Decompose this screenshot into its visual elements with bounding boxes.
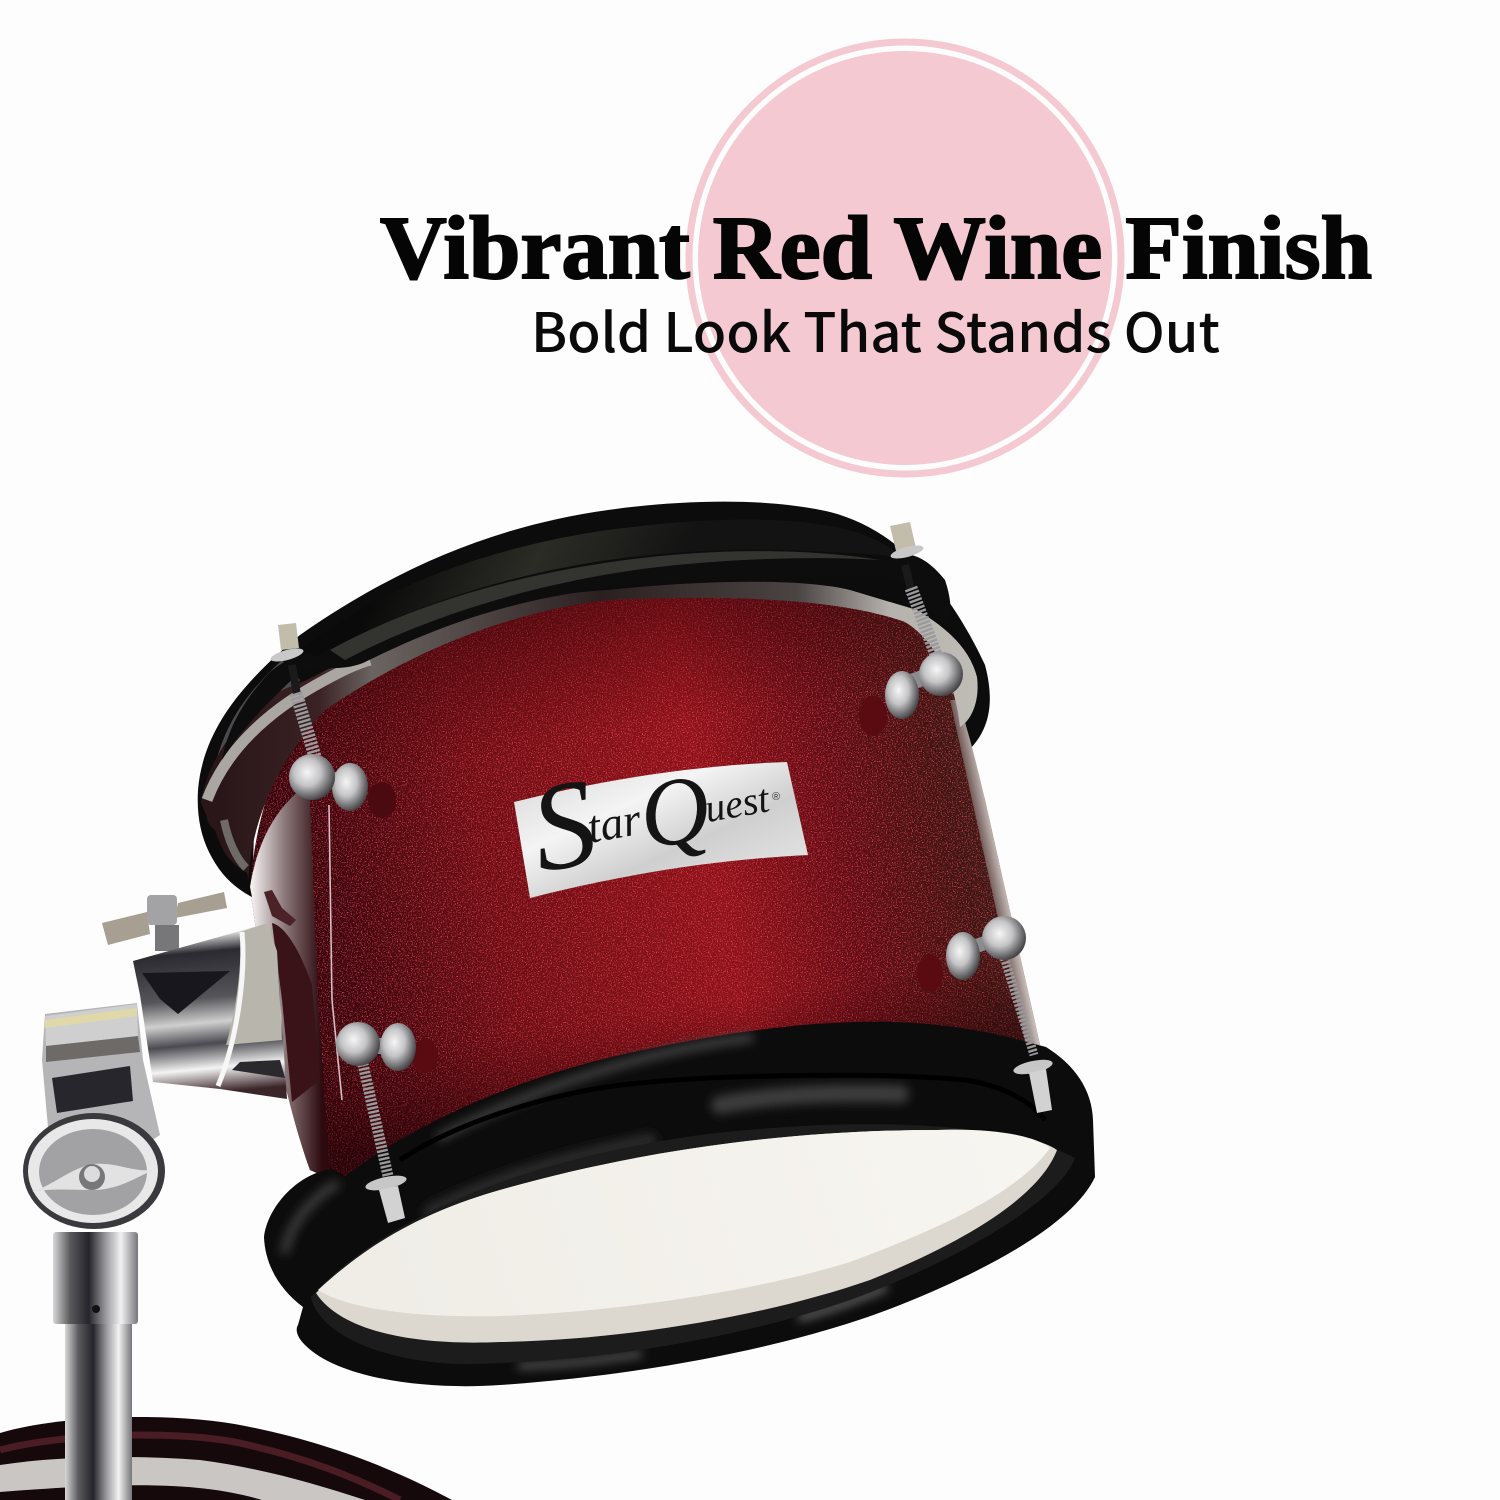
subtitle: Bold Look That Stands Out [531, 289, 1220, 368]
shell mounting slot [264, 890, 296, 926]
top hoop: lower left black edge [200, 800, 252, 897]
clamp: wing screw [102, 892, 227, 951]
top hoop: band highlight [330, 551, 880, 660]
clamp: mount plate [272, 923, 320, 1102]
drum head: side wall [316, 1130, 1057, 1343]
brand name: uest [701, 775, 773, 831]
top hoop: flange [200, 582, 978, 886]
shell seam line [329, 805, 342, 1100]
tension rod: lower right [917, 916, 1054, 1113]
top hoop: black front band [222, 550, 950, 760]
top hoop: back rim [198, 502, 990, 897]
shell right reflection [950, 700, 1040, 1045]
top hoop: silver edge [207, 660, 370, 800]
shell shading [283, 598, 1040, 1176]
bottom hoop: groove line [400, 1075, 1045, 1160]
brand label [514, 722, 808, 900]
lower drum rim at bottom [0, 1417, 452, 1500]
brand name: S [521, 753, 606, 900]
tension rod: upper right [859, 522, 963, 736]
top hoop: worn ring streak [224, 820, 246, 868]
bottom hoop: outer ring [264, 1022, 1095, 1386]
registered mark: ® [772, 791, 780, 803]
drum head: face [318, 1130, 1050, 1316]
bottom hoop: inner ring edge [311, 1124, 1075, 1364]
clamp: chrome body [133, 923, 287, 1099]
stand: tilter disc and wing nut [23, 1003, 165, 1229]
tension rod: upper left [269, 623, 396, 818]
tom shell [240, 590, 1050, 1200]
shell left reflection [250, 790, 330, 1175]
bottom hoop: groove highlights [285, 1038, 900, 1366]
shell sparkle texture [240, 590, 1050, 1200]
pink accent circle [689, 42, 1121, 474]
top hoop: left inner ring [214, 660, 300, 790]
stand: chrome rod and collar [53, 1232, 138, 1500]
top hoop: inner surface [300, 520, 900, 662]
tension rod: lower left [336, 1022, 438, 1223]
title: Vibrant Red Wine Finish [380, 199, 1372, 298]
brand name: tar [583, 793, 646, 853]
brand name: Q [631, 753, 718, 870]
